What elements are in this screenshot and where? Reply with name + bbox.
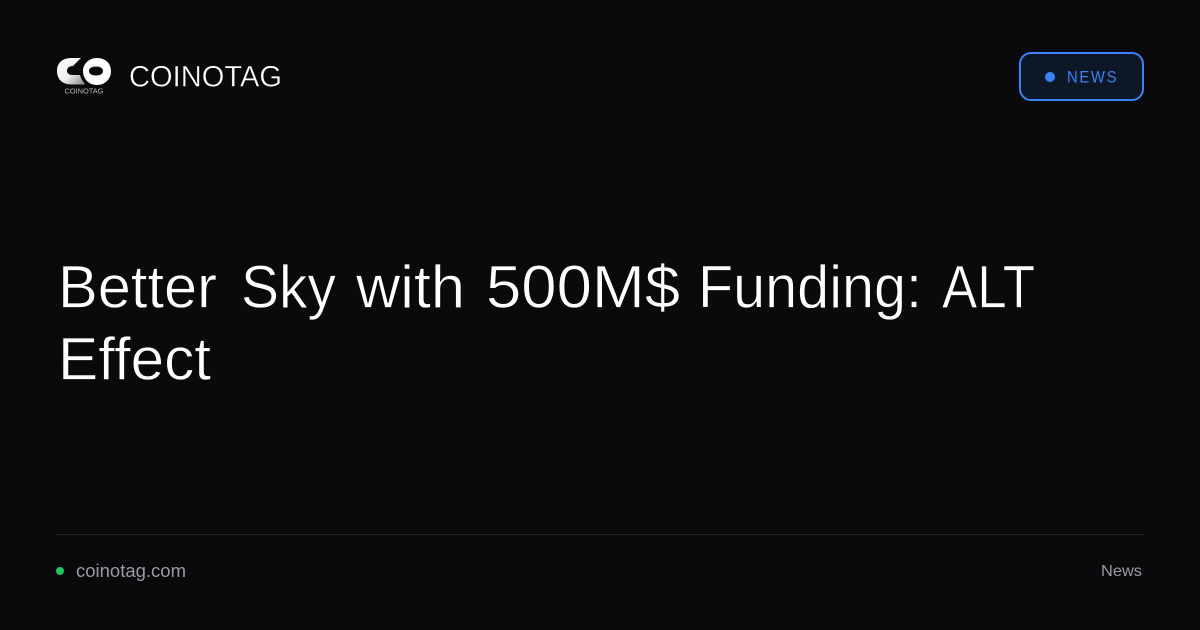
badge: news (1020, 53, 1143, 100)
status dot (56, 567, 64, 575)
site url: coinotag.com (76, 561, 186, 581)
title: Funding: (698, 254, 922, 320)
logo small text: COINOTAG (64, 88, 104, 96)
footer: site (56, 561, 186, 581)
badge dot (1045, 72, 1055, 82)
title: Effect (58, 326, 211, 392)
icon: logo mark (57, 58, 111, 85)
title: Sky (241, 254, 336, 320)
title: ALT (942, 254, 1035, 320)
title (58, 254, 1035, 392)
brand name: COINOTAG (129, 60, 282, 94)
title: 500M$ (486, 254, 680, 320)
logo (57, 58, 282, 96)
title: Better (58, 254, 217, 320)
footer: category: News (1101, 563, 1142, 580)
badge label: NEWS (1067, 69, 1117, 87)
title: with (355, 254, 465, 320)
